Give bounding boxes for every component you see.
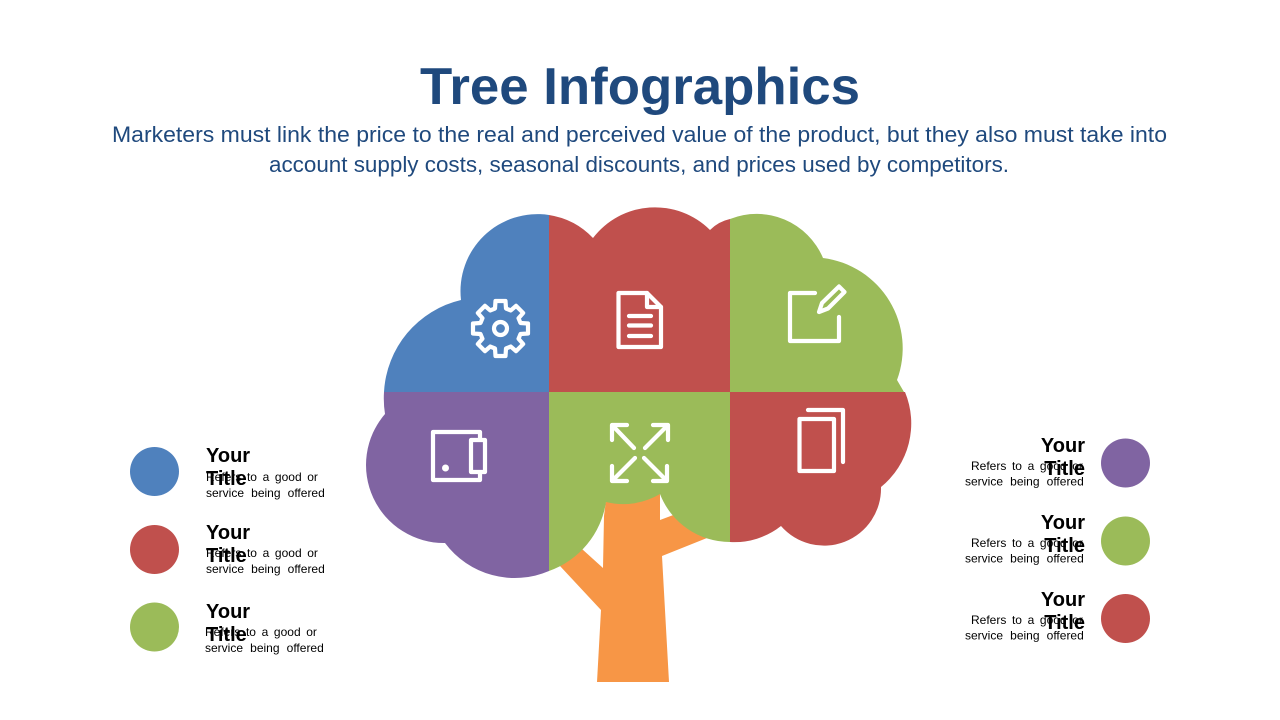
crown segment: red bottom right: [730, 392, 911, 546]
icon: copy pages: [800, 410, 843, 471]
legend item: green: [965, 512, 1150, 566]
legend item: green: service being offered: [205, 641, 324, 655]
legend item: purple: service being offered: [965, 474, 1084, 488]
subtitle: Marketers must link the price to the real and perceived value of the product, but they also must take into: [112, 122, 1167, 147]
legend item: blue: service being offered: [206, 486, 325, 500]
legend item: blue: Refers to a good or: [206, 470, 318, 484]
legend item: blue: Title: [206, 468, 247, 490]
legend item: purple: Refers to a good or: [971, 459, 1083, 473]
legend item: red: [130, 522, 325, 576]
subtitle: account supply costs, seasonal discounts, and prices used by competitors.: [269, 152, 1009, 177]
icon: expand arrows: [612, 425, 668, 481]
legend item: green: Your: [206, 601, 250, 623]
legend item: red: service being offered: [965, 628, 1084, 642]
legend item: red: Your: [206, 522, 250, 544]
legend item: red: Refers to a good or: [971, 613, 1083, 627]
legend item: green: Refers to a good or: [205, 625, 317, 639]
crown segment: red top centre: [549, 207, 730, 392]
title: Tree Infographics: [420, 58, 860, 116]
crown segment: green top right: [730, 214, 904, 392]
legend item: green: Title: [206, 624, 247, 646]
icon: document: [618, 293, 661, 347]
crown segment: purple bottom left: [366, 392, 549, 578]
left legend: [130, 445, 325, 655]
legend item: red: service being offered: [206, 562, 325, 576]
crown segment: green bottom centre: [549, 392, 730, 571]
icon: note and pencil: [790, 286, 844, 341]
legend item: purple: Your: [1041, 435, 1085, 457]
subtitle: [112, 122, 1167, 177]
right legend: [965, 435, 1150, 643]
tree trunk and branches: [560, 492, 712, 682]
legend item: purple: [965, 435, 1150, 488]
tree illustration: [366, 207, 911, 682]
icon: gear: [473, 301, 528, 356]
legend item: red: Your: [1041, 589, 1085, 611]
legend item: blue: Your: [206, 445, 250, 467]
legend item: red: [965, 589, 1150, 643]
icon: tablet: [433, 432, 485, 480]
legend item: purple: Title: [1044, 458, 1085, 480]
legend item: green: Your: [1041, 512, 1085, 534]
legend item: green: service being offered: [965, 552, 1084, 566]
legend item: green: Refers to a good or: [971, 536, 1083, 550]
legend item: red: Refers to a good or: [206, 546, 318, 560]
legend item: green: Title: [1044, 535, 1085, 557]
legend item: red: Title: [206, 545, 247, 567]
legend item: green: [130, 601, 324, 655]
legend item: red: Title: [1044, 612, 1085, 634]
legend item: blue: [130, 445, 325, 500]
crown segment: blue top left: [384, 214, 549, 392]
